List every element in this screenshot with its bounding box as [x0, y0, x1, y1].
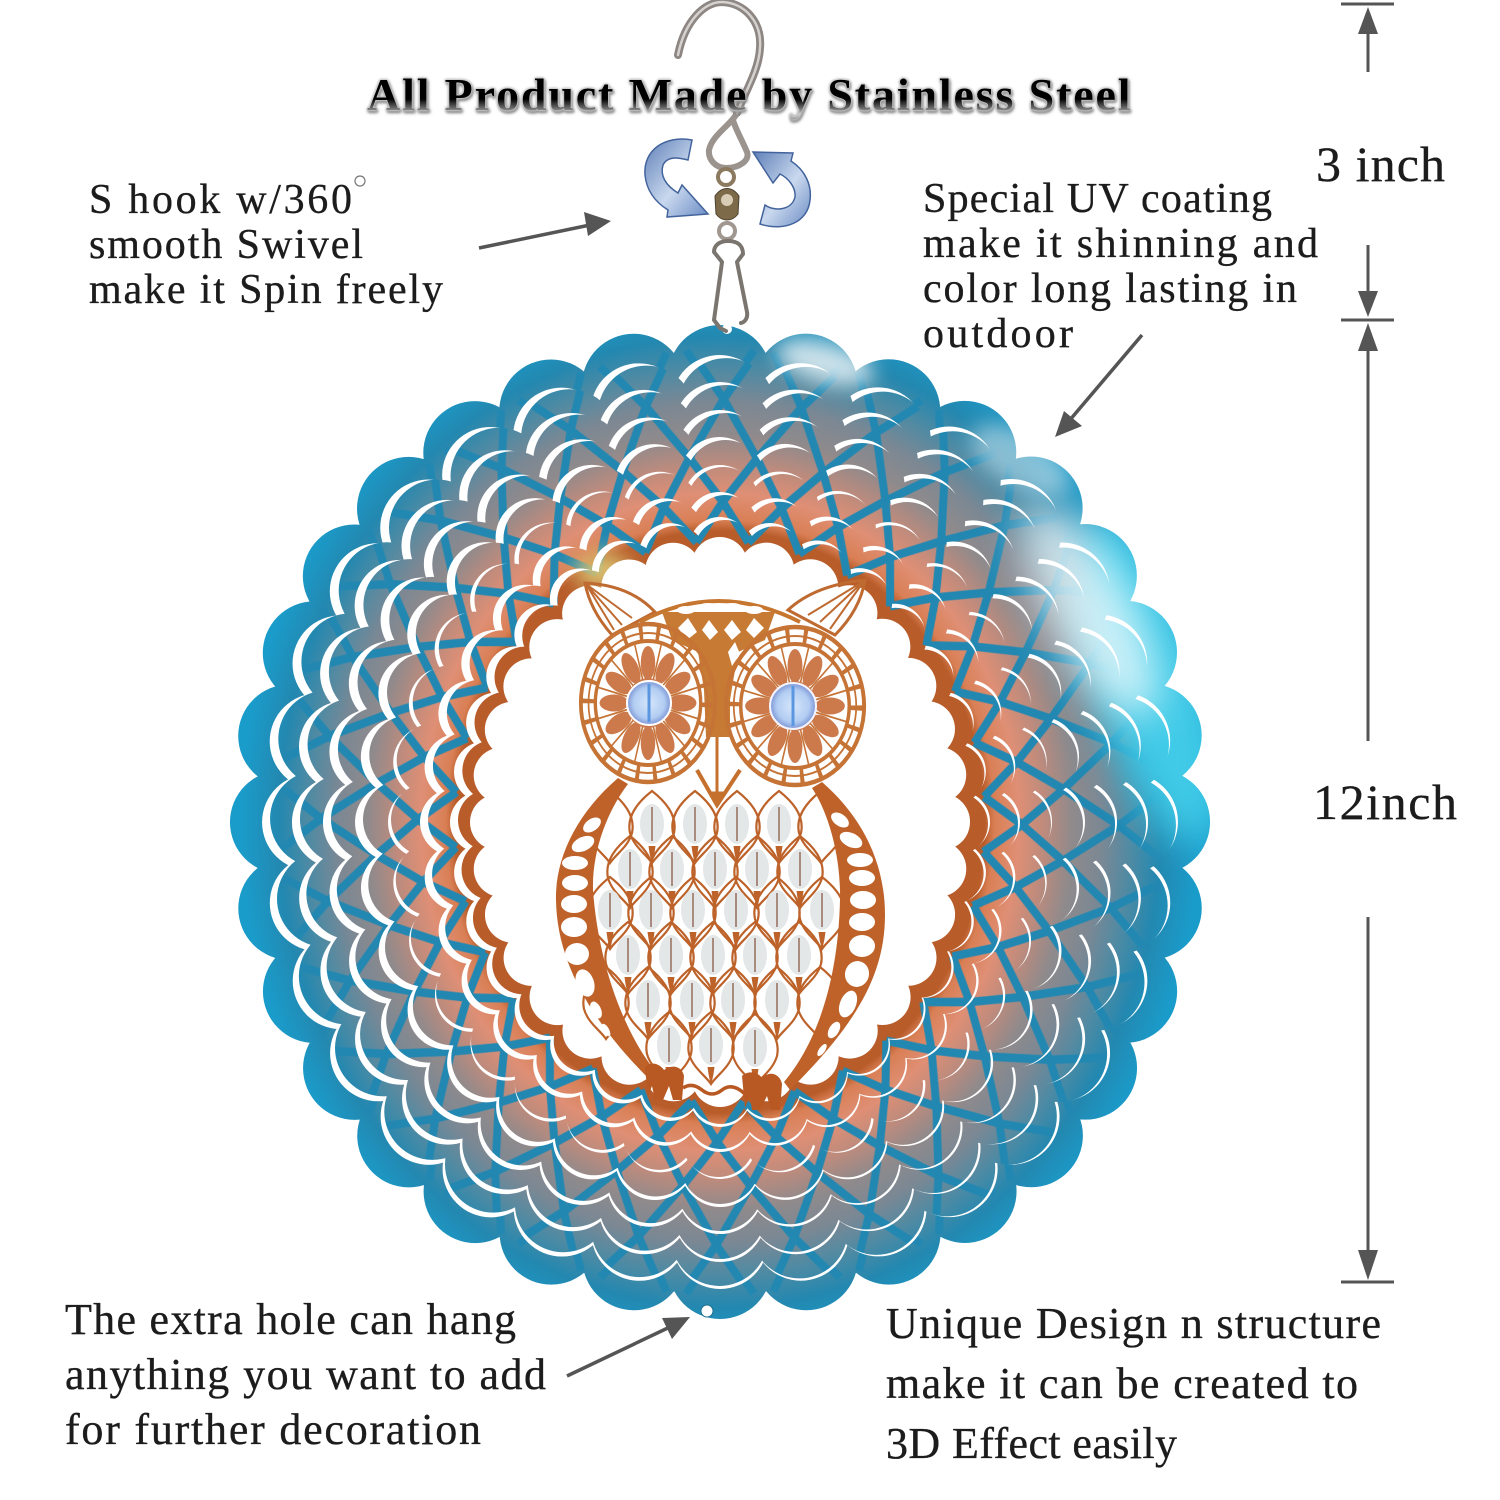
owl beak [697, 737, 740, 805]
callout: UV coating: color long lasting in [923, 266, 1297, 312]
owl right ear [788, 580, 865, 635]
ring 5 [394, 476, 1046, 1168]
callout: UV coating: make it shinning and [923, 221, 1318, 267]
callout: unique design: make it can be created to [886, 1359, 1358, 1408]
ring 8 inner rust [480, 548, 960, 1096]
callout: extra hole: for further decoration [65, 1405, 481, 1454]
callout: extra hole [65, 1295, 546, 1454]
callout: S hook: smooth Swivel [89, 222, 363, 268]
top hanging hole [722, 324, 732, 334]
callout: S hook [89, 176, 443, 313]
centre opening [498, 565, 942, 1079]
ring 1 outer blue [282, 377, 1158, 1267]
callout: S hook: make it Spin freely [89, 267, 443, 313]
owl body leaves [583, 791, 845, 1088]
right eye gem [770, 683, 816, 729]
arrow: extra hole callout [567, 1317, 690, 1376]
wing cut-outs [561, 809, 876, 1057]
ring 7 [453, 525, 987, 1119]
arrow: UV coating callout [1055, 335, 1142, 437]
owl right eye [726, 627, 864, 785]
owl head and forehead [640, 601, 800, 737]
title: All Product Made by Stainless Steel [367, 69, 1132, 120]
owl wings [556, 778, 885, 1090]
label: 3 inch: 3 inch [1316, 136, 1445, 192]
owl left foot [645, 1064, 684, 1100]
callout: unique design: 3D Effect easily [886, 1419, 1177, 1468]
dimension: 12 inch [1341, 323, 1394, 1282]
label: 12 inch: 12inch [1313, 774, 1457, 830]
left eye gem [627, 681, 671, 725]
ring 4 [366, 453, 1075, 1191]
callout: unique design: Unique Design n structure [886, 1299, 1381, 1348]
callout: UV coating: Special UV coating [923, 176, 1272, 222]
owl right foot [742, 1072, 782, 1110]
callout: UV coating: outdoor [923, 311, 1073, 357]
swivel [715, 169, 739, 239]
rotation arrow right [753, 152, 810, 227]
snap clip [714, 241, 747, 331]
callout: UV coating [923, 176, 1318, 357]
bottom extra hole [701, 1305, 713, 1317]
S hook and swivel [678, 2, 760, 331]
owl left eye [581, 624, 715, 782]
owl [556, 580, 885, 1110]
owl left ear [585, 583, 655, 635]
ring 2 [310, 403, 1131, 1241]
ring 6 [424, 501, 1017, 1143]
reflective glare on right [772, 330, 1183, 736]
dimension: 3 inch [1341, 4, 1394, 320]
branch [683, 1085, 745, 1094]
ring 3 [338, 428, 1104, 1216]
callout: unique design [886, 1299, 1381, 1468]
S hook [678, 2, 760, 168]
callout: extra hole: anything you want to add [65, 1350, 546, 1399]
wind spinner disc [282, 324, 1183, 1317]
callout: extra hole: The extra hole can hang [65, 1295, 516, 1344]
callout: S hook: S hook w/360 [89, 177, 352, 223]
arrow: swivel callout [479, 212, 611, 248]
rotation arrow left [645, 139, 708, 217]
